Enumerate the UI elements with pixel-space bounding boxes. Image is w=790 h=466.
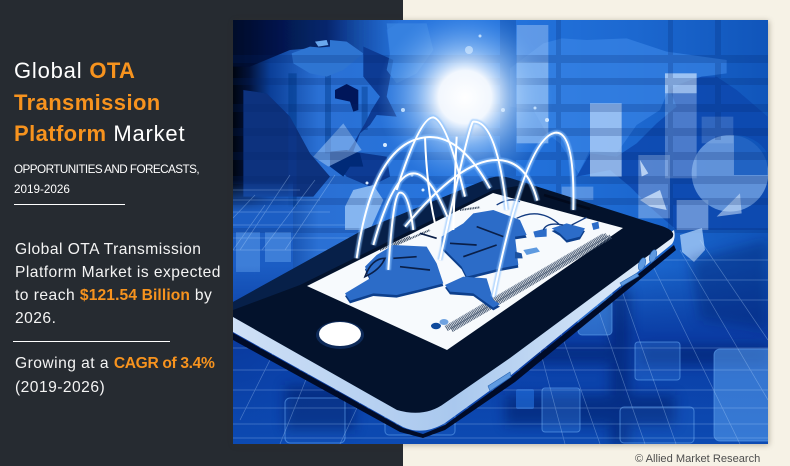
- divider: [14, 204, 125, 205]
- horizontal and vertical dark bands: [233, 20, 768, 240]
- Greenland: [387, 23, 433, 83]
- subtitle: OPPORTUNITIES AND FORECASTS,: [14, 163, 199, 176]
- dark arctic top: [233, 20, 403, 67]
- dark sea patches: [577, 77, 768, 230]
- arc lines: [357, 117, 573, 297]
- market size text: 2026.: [15, 310, 56, 327]
- title: Platform Market: [14, 121, 185, 146]
- rounded panels on lower area: [285, 285, 784, 443]
- arc halo: [357, 117, 573, 297]
- tablet speaker slot: [544, 195, 590, 209]
- screen text lines: [380, 207, 611, 330]
- map continents: [345, 210, 599, 308]
- map network links: [497, 200, 587, 230]
- market size text: Platform Market is expected: [15, 264, 221, 281]
- title: Transmission: [14, 90, 161, 115]
- divider: [13, 341, 170, 342]
- title: Global OTA: [14, 58, 135, 83]
- bars: [517, 25, 733, 230]
- map dark details: [365, 227, 503, 277]
- market size text: [15, 241, 221, 327]
- copyright: © Allied Market Research: [635, 453, 760, 465]
- perspective grid lines: [233, 175, 768, 444]
- subtitle: 2019-2026: [14, 183, 70, 196]
- subtitle: [14, 163, 199, 196]
- title: [14, 58, 185, 146]
- tablet face: [233, 176, 673, 413]
- glowing arcs: [357, 117, 573, 297]
- background gradient: [233, 18, 772, 343]
- map continent shadows: [345, 213, 585, 310]
- lower left blue fill: [233, 180, 293, 310]
- CAGR text: Growing at a CAGR of 3.4%: [15, 355, 214, 372]
- world map: Americas and oceans, left: [233, 20, 433, 230]
- central light glow: [382, 20, 537, 178]
- Hudson Bay: [335, 84, 358, 112]
- tablet body: [233, 176, 675, 431]
- tablet side edge: [233, 230, 675, 431]
- market size text: to reach $121.54 Billion by: [15, 287, 212, 304]
- panel: dark left background: [0, 0, 403, 466]
- CAGR text: (2019-2026): [15, 379, 105, 396]
- pie chart: [692, 135, 768, 212]
- Australia blob: [680, 228, 705, 262]
- Indonesia islands: [640, 160, 667, 210]
- market size text: Global OTA Transmission: [15, 241, 201, 258]
- Gulf of Mexico: [330, 150, 363, 177]
- Asia, bars and pie: [510, 25, 768, 230]
- Atlantic ocean dark: [344, 46, 396, 186]
- panel: cover image: [233, 18, 772, 448]
- South America light: [345, 185, 383, 230]
- screen dots: [431, 319, 448, 329]
- tablet side buttons: [488, 249, 658, 391]
- tablet screen: [307, 193, 623, 350]
- tablet shadow: [233, 245, 676, 438]
- Russia landmass: [510, 38, 727, 173]
- triangle: [313, 123, 362, 167]
- lower left light squares: [236, 232, 291, 272]
- home button: [316, 321, 364, 349]
- 3D world map on screen: [345, 200, 599, 310]
- CAGR text: [15, 355, 214, 396]
- dark Pacific area: [243, 90, 330, 197]
- column band: [288, 73, 297, 207]
- scattered light points: [366, 34, 549, 192]
- lower area shade: [233, 278, 768, 444]
- arctic islands: [292, 40, 363, 77]
- lower dark patches: [285, 240, 768, 445]
